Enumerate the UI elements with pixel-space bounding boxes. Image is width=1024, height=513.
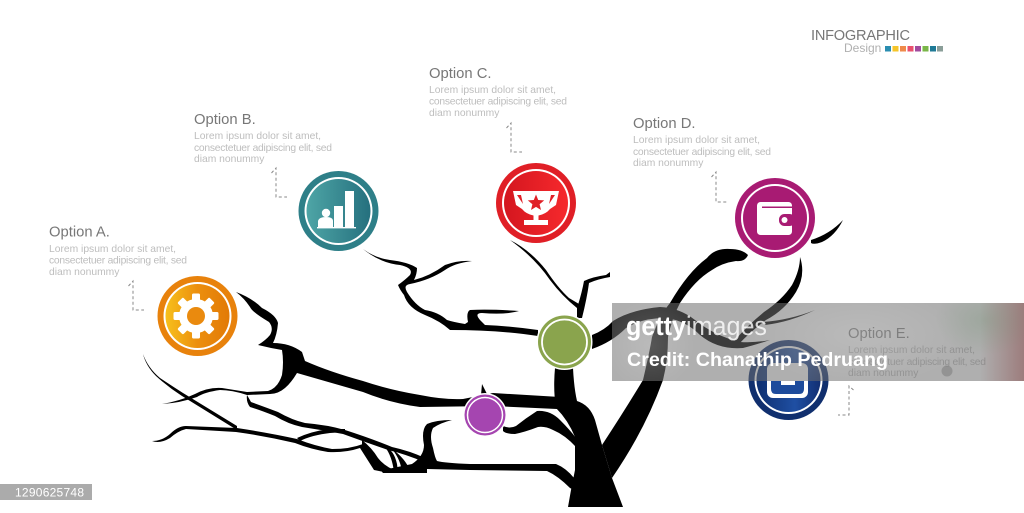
- text: option A: Lorem ipsum dolor sit amet,: [49, 244, 176, 255]
- left main branch: [162, 292, 560, 409]
- icon: gear, option A: [158, 276, 238, 356]
- text: option B: consectetuer adipiscing elit, sed: [194, 143, 332, 154]
- text: option A: [49, 224, 187, 278]
- text: option C: Option C.: [429, 66, 492, 82]
- branch under wallet: [734, 257, 802, 345]
- text: option D: consectetuer adipiscing elit, sed: [633, 147, 771, 158]
- tree silhouette: [143, 220, 843, 507]
- text: option E: [848, 326, 986, 379]
- node: purple circle: [463, 393, 507, 437]
- lower branch with upturned twig: [383, 420, 574, 490]
- text: option A: diam nonummy: [49, 267, 120, 278]
- icon: bar chart, option B: [298, 171, 378, 251]
- image id badge: [0, 484, 92, 500]
- branch right of purple node: [503, 411, 576, 447]
- icon: wallet, option D: [735, 178, 815, 258]
- icon: trophy, option C: [496, 163, 576, 243]
- trophy side twig: [578, 272, 610, 318]
- text: option E: diam nonummy: [848, 368, 919, 379]
- logo: infographic design: [811, 28, 943, 55]
- icon: briefcase, option E: [748, 340, 828, 420]
- branch toward chart icon: [363, 249, 538, 336]
- watermark: getty images: gettyimages: [626, 311, 767, 341]
- logo: infographic design: INFOGRAPHIC: [811, 28, 910, 44]
- text: option B: [194, 112, 332, 165]
- text: option C: diam nonummy: [429, 108, 500, 119]
- image id badge: 1290625748: [15, 486, 84, 500]
- logo: infographic design: Design: [844, 41, 881, 55]
- text: option C: Lorem ipsum dolor sit amet,: [429, 85, 556, 96]
- text: option E: consectetuer adipiscing elit, sed: [848, 357, 986, 368]
- text: option A: Option A.: [49, 224, 110, 240]
- text: option B: Lorem ipsum dolor sit amet,: [194, 131, 321, 142]
- arrow: option B: [272, 168, 287, 197]
- text: option D: diam nonummy: [633, 158, 704, 169]
- watermark: credit: Credit: Chanathip Pedruang: [627, 350, 888, 371]
- left long thin branches: [143, 354, 237, 430]
- text: option B: diam nonummy: [194, 154, 265, 165]
- arrow: option E: [838, 386, 854, 415]
- big right branch: [602, 249, 748, 478]
- small spike above purple: [481, 384, 487, 395]
- node: green circle: [536, 314, 592, 370]
- arrow: option D: [712, 172, 727, 202]
- arrow: option A: [128, 281, 144, 310]
- text: option B: Option B.: [194, 112, 256, 128]
- text: option D: Option D.: [633, 116, 696, 132]
- arrow: option C: [506, 123, 522, 152]
- text: option D: Lorem ipsum dolor sit amet,: [633, 135, 760, 146]
- text: option A: consectetuer adipiscing elit, sed: [49, 256, 187, 266]
- text: option D: [633, 116, 771, 169]
- curved branch from green node to the right: [592, 307, 770, 349]
- watermark overlay band: [612, 303, 1024, 381]
- branch toward trophy: [510, 240, 581, 318]
- thin twig under overlay: [763, 310, 815, 325]
- text: option C: consectetuer adipiscing elit, sed: [429, 96, 567, 108]
- text: option E: Option E.: [848, 326, 910, 342]
- text: option C: [429, 66, 567, 119]
- trunk: [554, 368, 623, 507]
- twig to the right of wallet: [811, 220, 843, 244]
- text: option E: Lorem ipsum dolor sit amet,: [848, 345, 975, 356]
